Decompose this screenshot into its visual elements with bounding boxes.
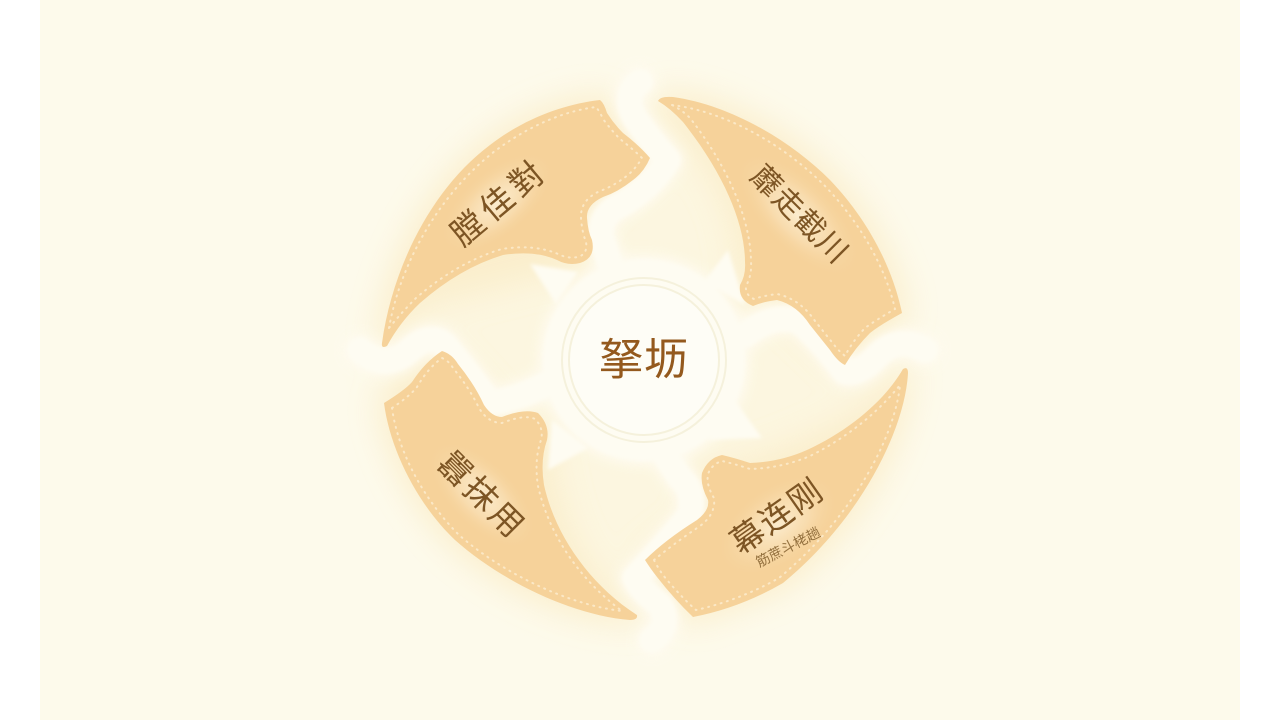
- panel: bottom-left petal: 囂抹用: [431, 444, 533, 546]
- panel: top-left petal: [382, 100, 650, 347]
- center hub: 拏坜: [599, 336, 689, 384]
- soft glow around petals: [382, 97, 905, 618]
- panel: bottom-left petal: [384, 351, 637, 620]
- center hub: [562, 278, 726, 442]
- panel: top-left petal: 膛佳對: [443, 151, 555, 253]
- panel: bottom-right petal: 幕连刚: [723, 471, 831, 561]
- panel: bottom-right petal: [645, 368, 908, 617]
- panel: top-right petal: 蘼走截川: [743, 159, 855, 271]
- halo behind wheel: [334, 50, 954, 670]
- panel: top-right petal: [658, 97, 902, 365]
- white swirl band glow: [360, 82, 925, 640]
- panel: bottom-right petal: 筋蔗斗栳趟: [753, 524, 823, 570]
- white swirl bands and hub disc: [360, 82, 925, 640]
